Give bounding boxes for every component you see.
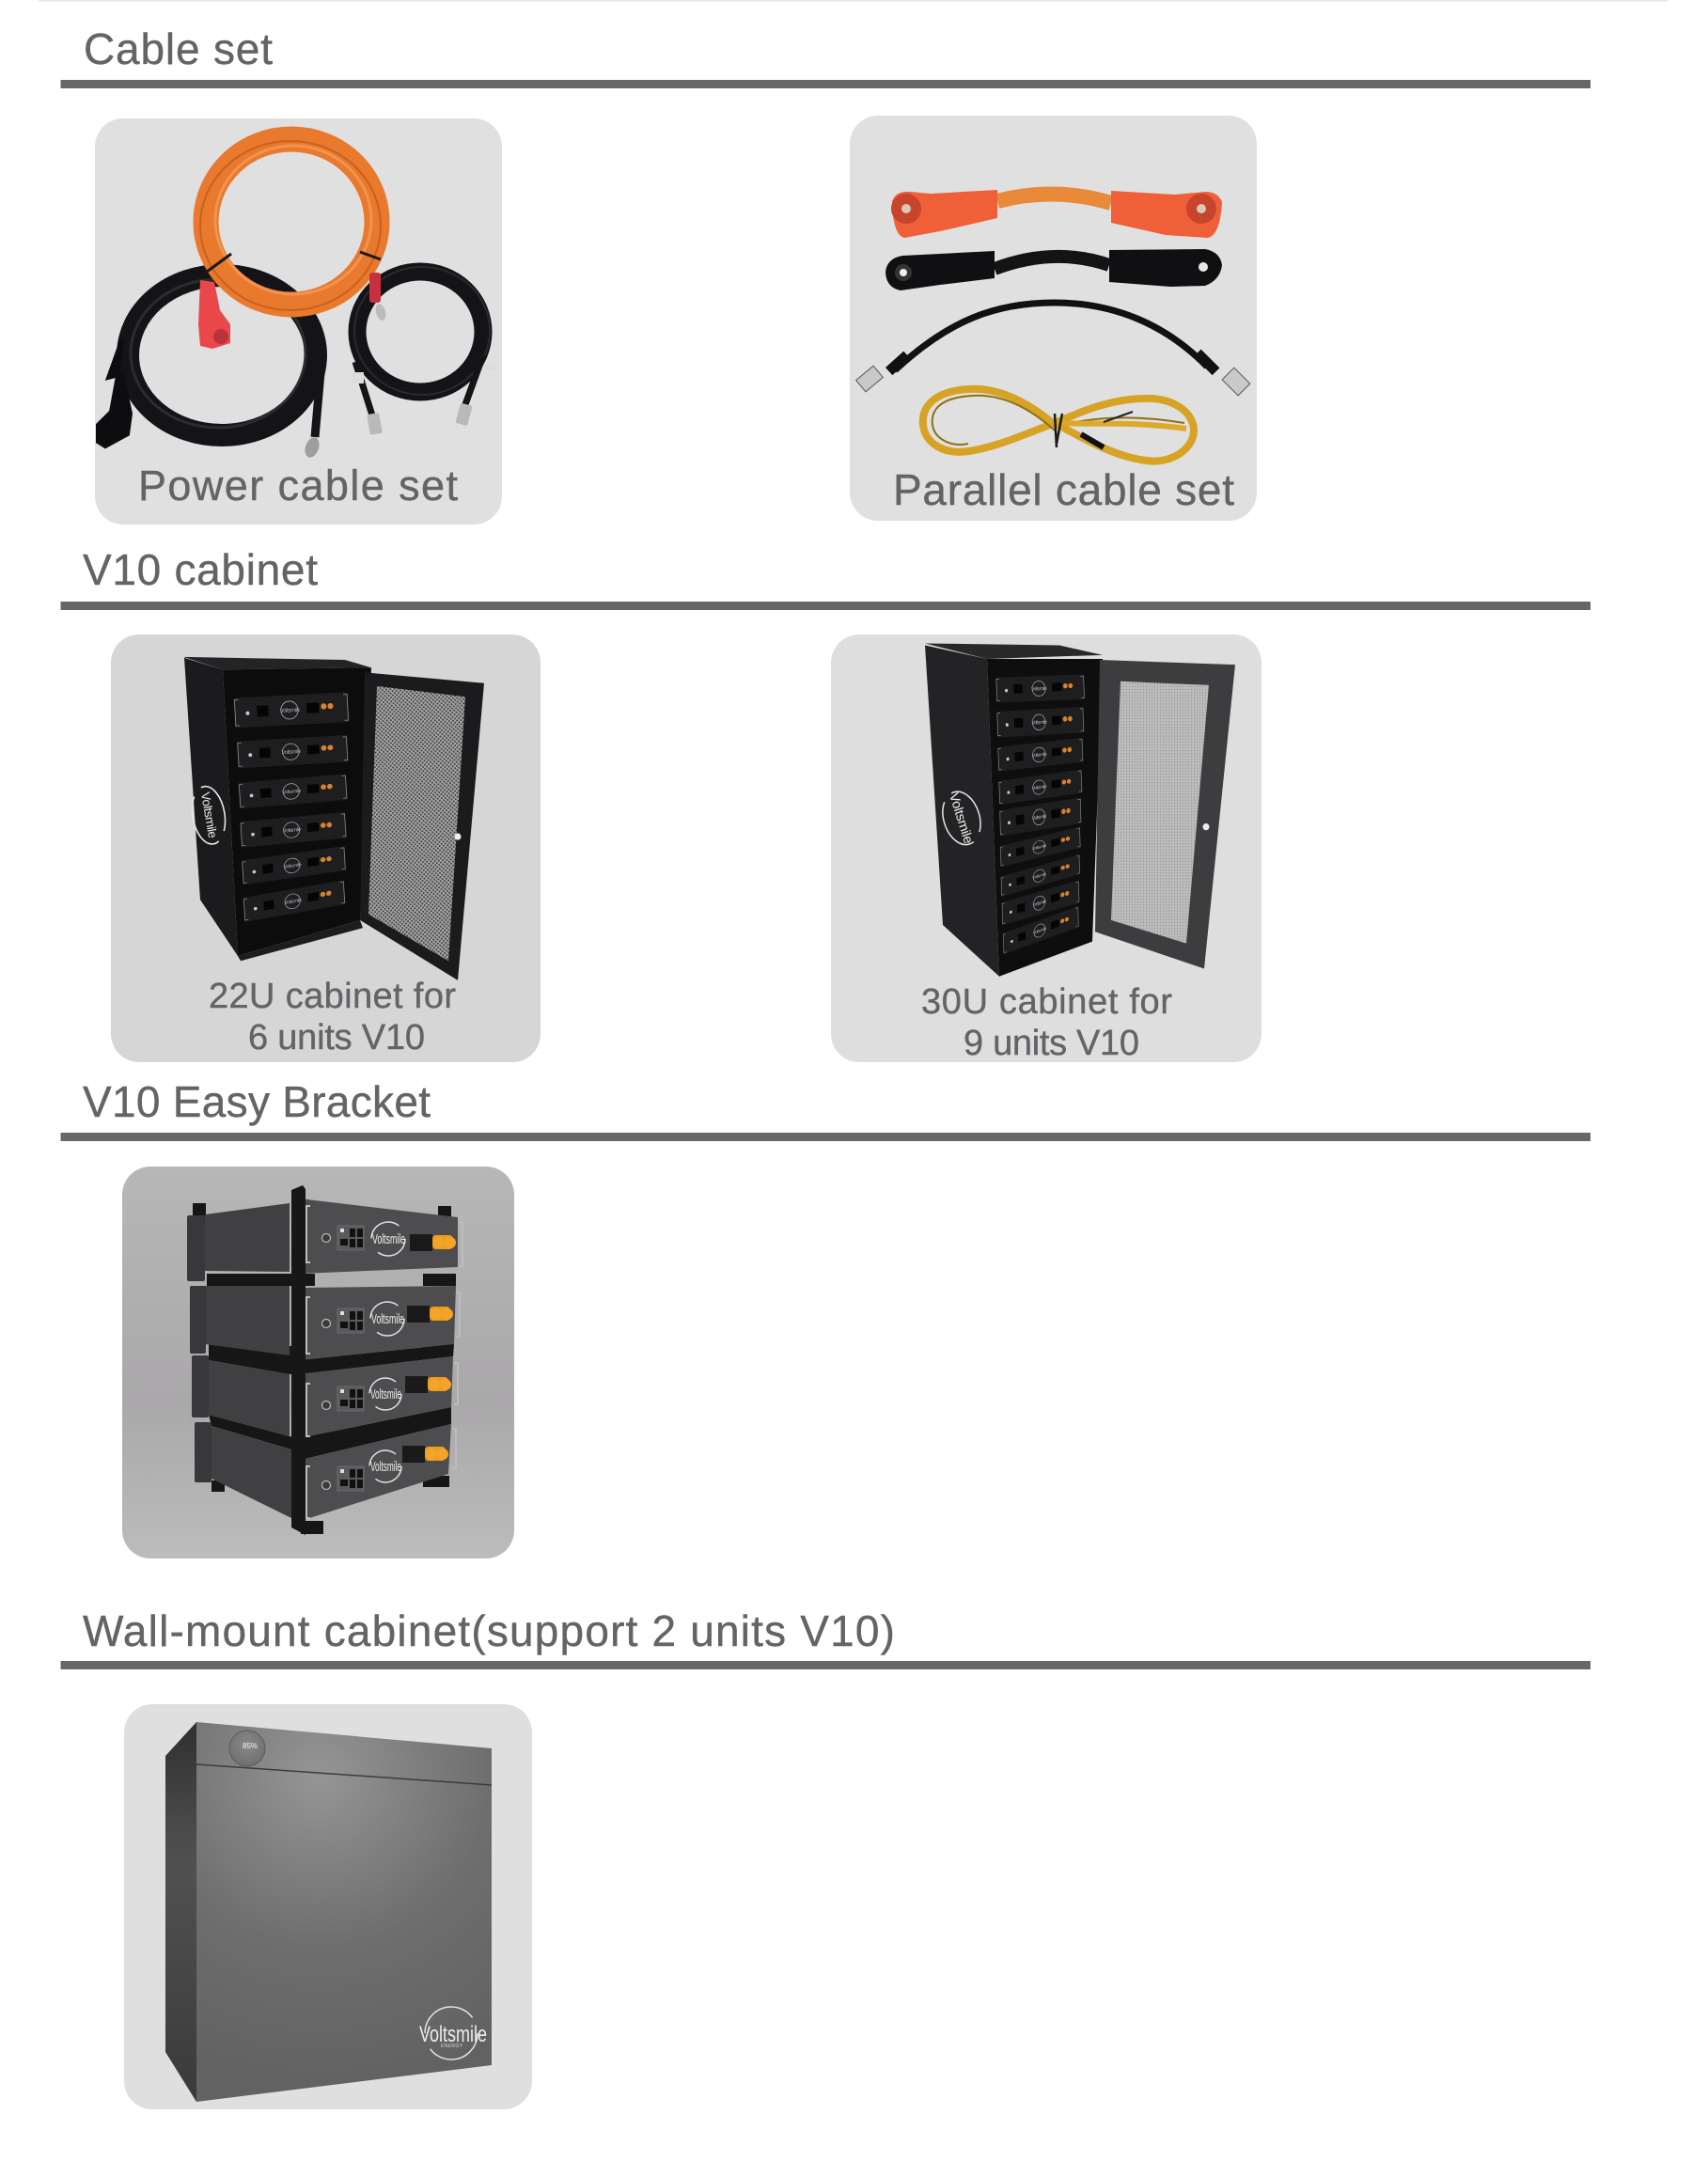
- battery 8: Voltsmile: [1033, 899, 1047, 907]
- battery 3: Voltsmile: [282, 789, 301, 796]
- status dial: 85%: [243, 1742, 258, 1750]
- icon: 30U cabinet with open door: [925, 643, 1235, 977]
- battery 1: [233, 692, 350, 728]
- panel: power cable set: [95, 118, 502, 525]
- battery 5: Voltsmile: [1032, 813, 1047, 822]
- caption: 22U cabinet: 22U cabinet for: [209, 977, 456, 1016]
- battery 5: [999, 797, 1082, 837]
- battery 5: [242, 846, 346, 885]
- battery row 3: Voltsmile: [370, 1386, 401, 1402]
- bracket pillar: [291, 1185, 306, 1535]
- caption: 30U cabinet: 9 units V10: [964, 1024, 1139, 1063]
- side logo: [188, 784, 229, 847]
- battery 2: Voltsmile: [281, 749, 301, 756]
- battery 8: [1001, 880, 1080, 925]
- section heading: Cable set: Cable set: [84, 24, 273, 73]
- caption: 30U cabinet: 30U cabinet for: [921, 982, 1172, 1022]
- battery row 3: [192, 1355, 458, 1438]
- battery 1: [995, 674, 1085, 702]
- caption: Power cable set: Power cable set: [138, 462, 458, 509]
- battery 6: [243, 880, 346, 922]
- section heading: Wall-mount cabinet: [60, 1606, 1590, 1669]
- section heading: V10 Easy Bracket: V10 Easy Bracket: [83, 1077, 431, 1126]
- panel: wall-mount cabinet: [124, 1704, 532, 2109]
- battery 9: Voltsmile: [1033, 926, 1047, 935]
- battery 3: [238, 774, 348, 808]
- icon: orange busbar cable: [891, 190, 1222, 238]
- icon: yellow earth cable: [923, 389, 1194, 462]
- icon: network patch cable: [856, 303, 1250, 396]
- battery 1: Voltsmile: [280, 707, 301, 714]
- section heading: V10 cabinet: V10 cabinet: [83, 545, 318, 594]
- panel: parallel cable set: [850, 116, 1257, 521]
- battery 4: Voltsmile: [283, 827, 302, 835]
- battery row 4: Voltsmile: [370, 1459, 401, 1475]
- battery 3: Voltsmile: [1032, 751, 1047, 760]
- door: [360, 672, 484, 980]
- battery 1: Voltsmile: [1031, 686, 1047, 693]
- panel: V10 Easy Bracket: [122, 1167, 514, 1558]
- brand logo: Voltsmile: [419, 2022, 487, 2047]
- caption: Parallel cable set: Parallel cable set: [893, 465, 1234, 514]
- icon: stacked batteries on bracket: [187, 1185, 462, 1535]
- battery 4: [240, 812, 347, 848]
- battery 5: Voltsmile: [283, 862, 302, 870]
- status dial: [229, 1731, 265, 1766]
- brand logo: [419, 2007, 487, 2060]
- battery row 4: [195, 1422, 456, 1521]
- side logo: [936, 787, 987, 850]
- section heading: Wall-mount cabinet: Wall-mount cabinet(support 2 units V10): [83, 1606, 895, 1655]
- panel: 30U cabinet: [831, 634, 1261, 1063]
- battery row 2: [190, 1286, 460, 1360]
- battery row 1: [187, 1198, 462, 1281]
- section heading: Cable set: [60, 24, 1590, 88]
- brand logo: ENERGY: [441, 2044, 463, 2049]
- battery 6: Voltsmile: [284, 898, 302, 906]
- battery 6: Voltsmile: [1032, 843, 1047, 851]
- battery 3: [997, 738, 1084, 772]
- icon: power cables: [98, 139, 497, 460]
- battery 2: Voltsmile: [1031, 719, 1047, 727]
- section heading: V10 cabinet: [60, 545, 1590, 610]
- icon: wall-mount cabinet: [165, 1722, 492, 2102]
- battery 9: [1003, 906, 1079, 954]
- battery 4: [998, 769, 1083, 805]
- battery 7: Voltsmile: [1032, 871, 1047, 880]
- side logo: Voltsmile: [946, 791, 976, 846]
- caption: 22U cabinet: 6 units V10: [248, 1018, 425, 1057]
- caption: 22U cabinet: [209, 977, 456, 1057]
- side logo: Voltsmile: [198, 791, 220, 839]
- battery 2: [237, 735, 349, 768]
- section heading: V10 Easy Bracket: [60, 1077, 1590, 1141]
- icon: black busbar cable: [885, 249, 1222, 290]
- battery row 2: Voltsmile: [371, 1311, 404, 1327]
- panel: 22U cabinet: [111, 634, 541, 1062]
- battery 6: [1000, 826, 1081, 867]
- caption: 30U cabinet: [921, 982, 1172, 1063]
- icon: 22U cabinet with open door: [183, 657, 484, 980]
- door: [1095, 660, 1235, 968]
- feet and rear brackets: [193, 1203, 456, 1534]
- battery 7: [1000, 854, 1080, 897]
- battery 2: [996, 707, 1085, 738]
- battery row 1: Voltsmile: [372, 1231, 405, 1247]
- battery 4: Voltsmile: [1032, 784, 1047, 791]
